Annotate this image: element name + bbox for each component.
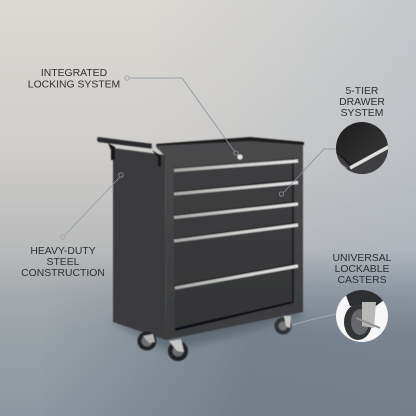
back right wheel (274, 316, 292, 334)
leader line (65, 177, 120, 235)
label text: HEAVY-DUTY (30, 246, 96, 257)
leader line (292, 314, 336, 325)
drawer handles (174, 161, 298, 288)
cabinet side panel (113, 148, 166, 340)
front left wheel (138, 332, 156, 350)
cabinet front frame (165, 143, 303, 340)
label text: LOCKABLE (335, 264, 389, 275)
floor shadow (112, 306, 305, 352)
label text: UNIVERSAL (333, 253, 392, 264)
callout: integrated locking system (28, 68, 238, 155)
detail circle: drawer close-up (336, 122, 390, 174)
front right wheel (168, 339, 188, 361)
leader line (130, 78, 235, 152)
leader line (284, 149, 337, 192)
label text: 5-TIER (346, 86, 379, 97)
label text: CONSTRUCTION (21, 268, 105, 279)
label text: DRAWER (339, 97, 385, 108)
drawer panel (173, 158, 294, 331)
callout: universal lockable casters (292, 253, 392, 342)
label text: LOCKING SYSTEM (28, 80, 120, 90)
drawer dividers (174, 180, 295, 286)
tool cabinet (97, 137, 304, 361)
detail circle: caster close-up (336, 290, 388, 342)
label text: INTEGRATED (41, 68, 107, 79)
callout: heavy-duty steel construction (21, 173, 123, 279)
callout: 5-tier drawer system (279, 86, 390, 196)
side handle (97, 137, 161, 167)
top tray (155, 138, 303, 156)
label text: STEEL (47, 257, 80, 268)
label text: CASTERS (337, 275, 387, 286)
label text: SYSTEM (341, 108, 383, 119)
lock (238, 154, 242, 160)
